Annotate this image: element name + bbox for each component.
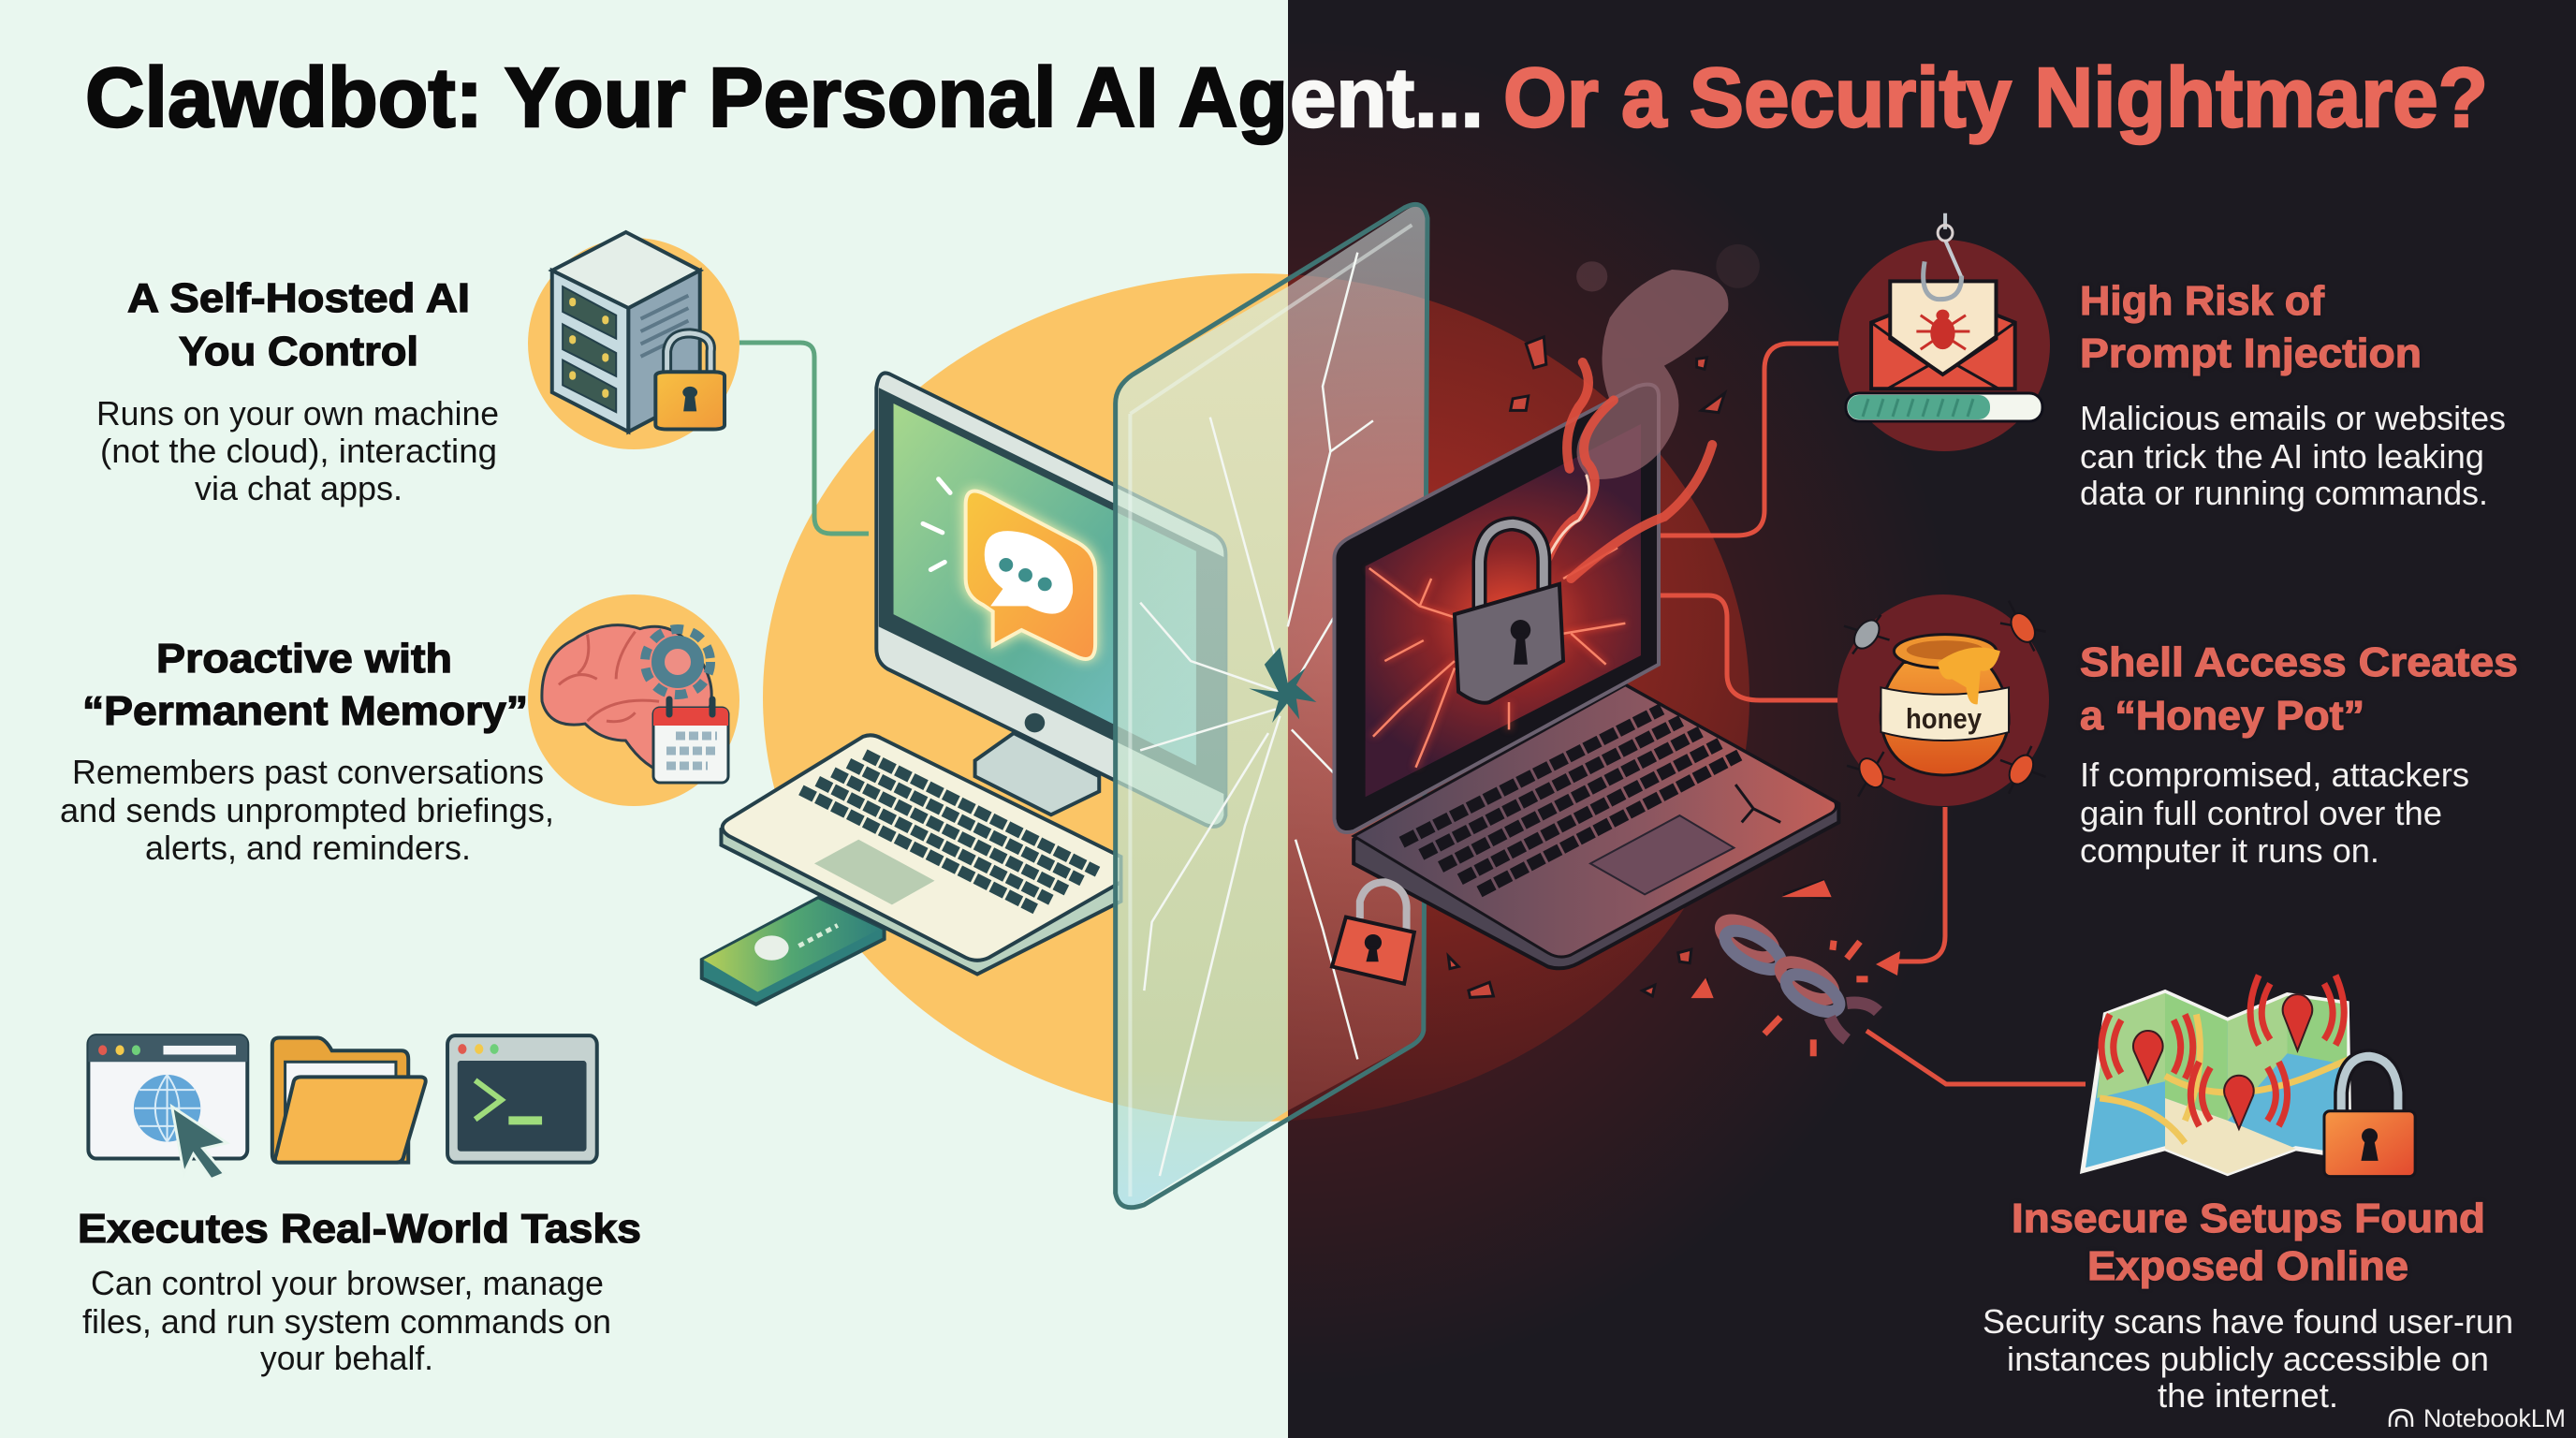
- label: honey: honey: [1906, 702, 1983, 735]
- icon: map with exposed pins and lock: [2083, 976, 2415, 1177]
- smoke plume: [1576, 244, 1760, 479]
- monitor power button: [1025, 713, 1045, 732]
- connector: chain to exposed map: [1866, 1031, 2086, 1084]
- arrow: honey pot to broken chain: [1876, 807, 1945, 976]
- body text: your behalf.: [260, 1339, 433, 1377]
- body text: data or running commands.: [2080, 474, 2488, 512]
- dark trackpad: [1590, 815, 1734, 894]
- body text: Runs on your own machine: [96, 394, 499, 433]
- icon circle: honey pot: [1837, 594, 2049, 806]
- heading: a “Honey Pot”: [2080, 693, 2364, 739]
- heading: A Self-Hosted AI: [127, 275, 470, 321]
- laptop screen frame: [1334, 385, 1659, 832]
- connector: laptop to prompt injection: [1658, 344, 1838, 536]
- feature: self-hosted AI: [96, 232, 739, 507]
- icon circle: phishing: [1838, 240, 2050, 451]
- body text: instances publicly accessible on: [2007, 1340, 2489, 1378]
- body text: gain full control over the: [2080, 794, 2442, 832]
- icon: honey jar with bugs: [1881, 635, 2009, 775]
- title: Or a Security Nightmare?: [1503, 51, 2488, 145]
- connector: server to monitor: [739, 343, 869, 534]
- heading: Exposed Online: [2087, 1243, 2408, 1289]
- icon: progress bar: [1846, 393, 2042, 421]
- dark keyboard: [1402, 709, 1739, 891]
- body text: Remembers past conversations: [72, 753, 544, 791]
- monitor bezel: [879, 388, 1225, 795]
- body text: and sends unprompted briefings,: [60, 791, 554, 829]
- monitor body: [876, 373, 1225, 827]
- laptop top deck: [723, 735, 1120, 961]
- debris shards: [1448, 337, 1829, 997]
- title: [85, 51, 2488, 145]
- glass impact point: [1249, 647, 1316, 723]
- illustration: secure desktop and laptop: [702, 373, 1225, 1005]
- body text: Malicious emails or websites: [2080, 399, 2506, 437]
- USB drive: [702, 898, 885, 1005]
- glass divider: [1116, 204, 1427, 1208]
- heading: Shell Access Creates: [2080, 639, 2518, 685]
- keyboard keys: [801, 755, 1098, 909]
- risk: honey pot: [1837, 594, 2518, 870]
- feature: real-world tasks: [78, 1035, 641, 1377]
- flames: [1547, 362, 1712, 579]
- glass frame: [1116, 204, 1427, 1208]
- body text: files, and run system commands on: [82, 1302, 611, 1341]
- watermark: NotebookLM: NotebookLM: [2423, 1404, 2566, 1432]
- glass cracks: [1140, 253, 1373, 1176]
- illustration: compromised laptop: [1332, 244, 1838, 997]
- body text: via chat apps.: [195, 469, 402, 507]
- icon: phishing envelope with bug: [1871, 213, 2015, 389]
- heading: You Control: [179, 329, 418, 374]
- icon circle: server: [528, 238, 739, 449]
- padlock on screen: [1455, 523, 1563, 703]
- deck crack: [1735, 785, 1780, 822]
- body text: If compromised, attackers: [2080, 756, 2469, 794]
- laptop base and edge: [1354, 685, 1838, 968]
- body text: Can control your browser, manage: [91, 1264, 604, 1302]
- icon: bugs: [1844, 601, 2046, 797]
- orange backdrop circle, safe half: [763, 273, 1288, 1122]
- panel: light left background: [0, 0, 1288, 1438]
- glass inner edge: [1130, 225, 1412, 1196]
- icon: gear: [645, 629, 710, 695]
- body text: (not the cloud), interacting: [100, 432, 497, 470]
- feature: permanent memory: [60, 594, 739, 867]
- dark red ambient glow: [1288, 0, 2224, 1438]
- glass pane left half: [1117, 286, 1288, 1206]
- title: ent...: [1290, 51, 1484, 145]
- risk: exposed online: [1983, 976, 2513, 1415]
- title: Clawdbot: Your Personal AI Ag: [85, 51, 1288, 145]
- screen cracks: [1369, 548, 1625, 768]
- icon: browser window: [88, 1035, 247, 1180]
- small red padlock: [1332, 882, 1414, 984]
- monitor stand: [975, 733, 1099, 814]
- heading: “Permanent Memory”: [82, 688, 528, 734]
- icon: terminal window: [447, 1035, 597, 1163]
- monitor screen: [894, 404, 1196, 766]
- body text: Security scans have found user-run: [1983, 1302, 2513, 1341]
- icon: folder: [272, 1038, 426, 1163]
- icon: calendar: [653, 699, 728, 783]
- body text: alerts, and reminders.: [145, 829, 471, 867]
- laptop base: [721, 737, 1120, 974]
- trackpad: [814, 840, 934, 904]
- glass pane right half: [1288, 206, 1426, 1110]
- cracked screen: [1366, 424, 1641, 797]
- red backdrop circle, danger half: [1288, 274, 1749, 1121]
- heading: Proactive with: [156, 636, 452, 682]
- body text: can trick the AI into leaking: [2080, 437, 2484, 476]
- icon: server with padlock: [552, 232, 724, 432]
- icon: brain: [542, 625, 711, 774]
- chat app icon: [923, 479, 1095, 659]
- risk: prompt injection: [1838, 213, 2506, 512]
- laptop deck: [1354, 685, 1837, 957]
- heading: Prompt Injection: [2080, 330, 2422, 376]
- heading: Insecure Setups Found: [2012, 1196, 2485, 1241]
- icon circle: brain: [528, 594, 739, 806]
- broken chain: [1697, 880, 1878, 1056]
- body text: computer it runs on.: [2080, 831, 2379, 870]
- panel: dark right background: [1288, 0, 2576, 1438]
- body text: the internet.: [2158, 1376, 2338, 1415]
- heading: High Risk of: [2080, 278, 2324, 324]
- connector: laptop to honey pot: [1661, 595, 1839, 700]
- heading: Executes Real-World Tasks: [78, 1206, 641, 1252]
